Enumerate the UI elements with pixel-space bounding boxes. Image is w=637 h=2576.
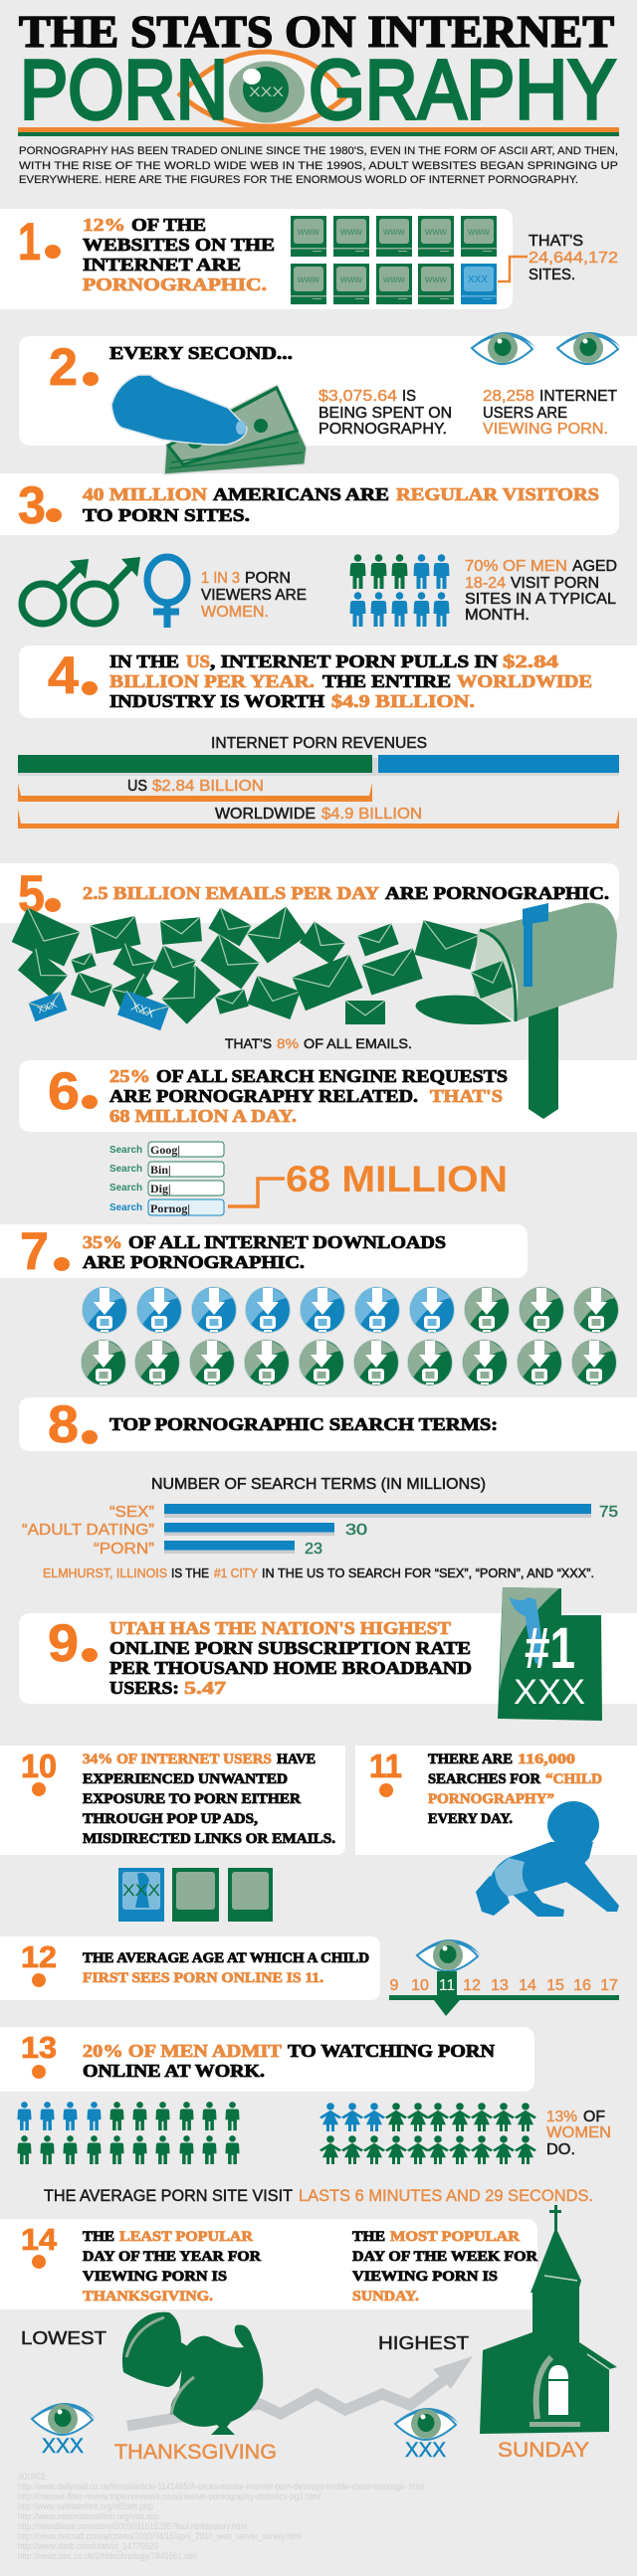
icon: cash stack bbox=[164, 385, 307, 474]
icon: utah map bbox=[498, 1587, 602, 1721]
panel background bbox=[19, 645, 637, 718]
source list: http://news.bbc.co.uk/2/hi/technology/7845561.stm bbox=[18, 2551, 197, 2561]
panel background bbox=[19, 1060, 637, 1132]
search queries: Dig| bbox=[150, 1182, 171, 1196]
source list: http://internet-filter-review.toptenreviews.com/internet-pornography-statistics-pg3.html bbox=[18, 2491, 320, 2501]
stat text: $4.9 BILLION. bbox=[331, 691, 475, 711]
stat text: AMERICANS ARE bbox=[213, 484, 389, 504]
text: 8 percent of emails: 8% bbox=[277, 1035, 299, 1051]
text: users viewing bbox=[483, 388, 617, 438]
stat text: THE AVERAGE AGE AT WHICH A CHILD bbox=[83, 1950, 369, 1966]
stat text: PORNOGRAPHY” bbox=[428, 1791, 554, 1807]
icon: eye behind the title: XXX bbox=[249, 84, 285, 99]
panel: stat 10 bbox=[0, 1746, 345, 1855]
panel: stat 9 bbox=[19, 1587, 637, 1721]
stat text: USERS: bbox=[109, 1678, 179, 1698]
stat text: THAT'S bbox=[430, 1086, 503, 1106]
text: least popular bbox=[83, 2229, 261, 2304]
icon: eye behind the title bbox=[180, 52, 345, 126]
age numbers: 10 bbox=[411, 1977, 429, 1994]
number 2: 2 bbox=[49, 338, 78, 397]
number 5: 5 bbox=[18, 865, 45, 924]
text: men aged 18-24: VISIT PORN bbox=[511, 575, 599, 592]
stat text: OF ALL INTERNET DOWNLOADS bbox=[128, 1232, 446, 1252]
panel background bbox=[0, 2219, 537, 2309]
stat text: 68 MILLION A DAY. bbox=[109, 1106, 297, 1126]
number 1: 1 bbox=[18, 213, 41, 272]
number 7 bbox=[20, 1222, 70, 1281]
text: users viewing: 28,258 bbox=[483, 388, 534, 405]
computer grid: www bbox=[382, 275, 405, 285]
search labels: Search bbox=[109, 1163, 142, 1175]
blue xxx envelopes: XXX bbox=[36, 1000, 59, 1016]
text: 13 percent of women: 13% bbox=[546, 2109, 577, 2125]
stat text: OF THE bbox=[131, 215, 206, 235]
panel background bbox=[19, 336, 637, 446]
stat text bbox=[83, 1950, 369, 1986]
stat text: US bbox=[186, 651, 210, 671]
us bracket: $2.84 BILLION bbox=[152, 778, 264, 795]
text: dollars spent bbox=[318, 388, 452, 438]
bar labels: “ADULT DATING” bbox=[22, 1522, 154, 1539]
number 6 bbox=[48, 1062, 98, 1121]
stat text: ONLINE AT WORK. bbox=[83, 2061, 265, 2081]
blue xxx envelopes: XXX bbox=[129, 1000, 156, 1020]
stat text: TO PORN SITES. bbox=[83, 505, 250, 525]
stat text bbox=[83, 1751, 335, 1847]
text: women viewers: WOMEN. bbox=[201, 604, 269, 621]
icon: utah map: XXX bbox=[514, 1673, 585, 1712]
icon: three monitors bbox=[118, 1868, 273, 1922]
computer grid: www bbox=[297, 275, 319, 285]
search labels: Search bbox=[109, 1201, 142, 1213]
panel: stat 6 bbox=[19, 1060, 637, 1132]
icon: eye low bbox=[30, 2403, 96, 2435]
source list: SOURCE: bbox=[18, 2472, 48, 2482]
sites callout: SITES. bbox=[529, 267, 575, 283]
search queries: Bin| bbox=[150, 1163, 171, 1177]
intro paragraph bbox=[19, 145, 618, 186]
source list bbox=[18, 2472, 424, 2561]
stat text: 40 MILLION bbox=[83, 484, 207, 504]
age numbers: 13 bbox=[491, 1977, 509, 1994]
age numbers: 9 bbox=[390, 1977, 399, 1994]
text: 13 percent of women: WOMEN bbox=[546, 2124, 611, 2141]
timeline bar and pointer bbox=[389, 1971, 619, 2016]
number 3: 3 bbox=[18, 476, 46, 535]
number 8: 8 bbox=[48, 1395, 79, 1454]
sites callout bbox=[529, 233, 618, 283]
worldwide bracket: WORLDWIDE bbox=[215, 806, 316, 823]
stat text: EVERY DAY. bbox=[428, 1811, 513, 1827]
number 5 bbox=[18, 865, 61, 924]
age numbers: 12 bbox=[463, 1977, 481, 1994]
header stripe bbox=[18, 127, 619, 136]
icon: eye high bbox=[393, 2408, 459, 2440]
worldwide bracket bbox=[18, 806, 619, 828]
panel: stat 14 bbox=[0, 2219, 537, 2309]
note: elmhurst: #1 CITY bbox=[214, 1566, 259, 1580]
panel background bbox=[0, 209, 513, 309]
computer grid: www bbox=[297, 227, 319, 238]
search boxes bbox=[109, 1142, 224, 1215]
panel: stat 13 bbox=[0, 2027, 534, 2092]
text: most popular: DAY OF THE WEEK FOR bbox=[352, 2249, 537, 2265]
source list: http://news.netcraft.com/archives/2010/04/15/april_2010_web_server_survey.html bbox=[18, 2531, 302, 2541]
people grid: 70 percent of men bbox=[350, 554, 450, 627]
stat text: 35% bbox=[83, 1232, 122, 1252]
text: 8 percent of emails: OF ALL EMAILS. bbox=[304, 1035, 412, 1051]
stat text: WEBSITES ON THE bbox=[83, 235, 275, 255]
text: men aged 18-24: SITES IN A TYPICAL bbox=[465, 591, 616, 608]
note: elmhurst bbox=[43, 1566, 594, 1580]
stat text: IN THE bbox=[109, 651, 179, 671]
stat text: THROUGH POP UP ADS, bbox=[83, 1811, 258, 1827]
stat text bbox=[83, 2041, 495, 2081]
text: women viewers: 1 IN 3 bbox=[201, 570, 240, 587]
icon: church bbox=[480, 2205, 617, 2434]
blue xxx envelopes bbox=[29, 991, 169, 1030]
number 7: 7 bbox=[20, 1222, 49, 1281]
stat text: TOP PORNOGRAPHIC SEARCH TERMS: bbox=[109, 1414, 498, 1434]
title line: the stats on internet: THE STATS ON INTERNET bbox=[19, 7, 614, 57]
bars bbox=[164, 1504, 591, 1554]
stat text bbox=[109, 651, 592, 711]
intro paragraph: WITH THE RISE OF THE WORLD WIDE WEB IN THE 1990S, ADULT WEBSITES BEGAN SPRINGING UP bbox=[19, 160, 618, 172]
bar values: 75 bbox=[599, 1504, 618, 1521]
label: highest: HIGHEST bbox=[378, 2333, 469, 2353]
computer grid: www bbox=[424, 275, 447, 285]
people grid: men bbox=[17, 2102, 240, 2164]
text: men aged 18-24: 70% OF MEN bbox=[465, 558, 567, 575]
panel background bbox=[0, 1936, 380, 2000]
chart title: NUMBER OF SEARCH TERMS (IN MILLIONS) bbox=[151, 1476, 486, 1493]
heading: every second: EVERY SECOND... bbox=[109, 343, 293, 363]
text: most popular bbox=[352, 2229, 537, 2304]
panel background bbox=[0, 473, 619, 535]
icon: female symbol bbox=[147, 557, 187, 628]
search fields bbox=[148, 1142, 224, 1215]
chart: internet porn revenues bbox=[18, 735, 619, 828]
us bracket bbox=[18, 778, 372, 802]
stat text: THE ENTIRE bbox=[322, 671, 451, 691]
stat text: 5.47 bbox=[184, 1678, 226, 1698]
label: lowest: LOWEST bbox=[21, 2328, 106, 2348]
number 9: 9 bbox=[48, 1614, 79, 1673]
stat text bbox=[83, 215, 275, 294]
connector line bbox=[498, 257, 528, 281]
stat text: INDUSTRY IS WORTH bbox=[109, 691, 324, 711]
text: men aged 18-24: 18-24 bbox=[465, 575, 506, 592]
number 2 bbox=[49, 338, 99, 397]
search queries bbox=[150, 1143, 190, 1215]
text: average visit: LASTS 6 MINUTES AND 29 SECONDS. bbox=[299, 2186, 593, 2205]
bar values: 23 bbox=[305, 1541, 322, 1558]
age numbers: 15 bbox=[546, 1977, 564, 1994]
stat text: , INTERNET PORN PULLS IN bbox=[210, 651, 498, 671]
bar values bbox=[305, 1504, 618, 1558]
stat text: REGULAR VISITORS bbox=[396, 484, 599, 504]
computer grid: XXX bbox=[468, 275, 488, 285]
number 4: 4 bbox=[48, 646, 80, 705]
text: men aged 18-24: MONTH. bbox=[465, 607, 530, 624]
text: least popular: DAY OF THE YEAR FOR bbox=[83, 2249, 261, 2265]
bar labels: “PORN” bbox=[94, 1541, 154, 1558]
number 13 bbox=[21, 2030, 57, 2079]
age numbers bbox=[390, 1977, 618, 1994]
mailbox post bbox=[529, 1002, 558, 1119]
computer grid: www bbox=[424, 227, 447, 238]
text: most popular: MOST POPULAR bbox=[390, 2229, 520, 2245]
text: most popular: SUNDAY. bbox=[352, 2289, 419, 2304]
text: dollars spent: IS bbox=[402, 388, 416, 405]
eye icon bbox=[415, 1939, 481, 1971]
search queries: Pornog| bbox=[150, 1201, 190, 1215]
stat text: HAVE bbox=[277, 1751, 316, 1767]
note: elmhurst: ELMHURST, ILLINOIS bbox=[43, 1566, 167, 1580]
chart title: INTERNET PORN REVENUES bbox=[211, 735, 427, 752]
stat text: THERE ARE bbox=[428, 1751, 513, 1767]
stat text: FIRST SEES PORN ONLINE IS 11. bbox=[83, 1970, 323, 1986]
panel: stat 3 bbox=[0, 473, 619, 535]
text: least popular: THE bbox=[83, 2229, 114, 2245]
source list: http://www.sltrib.com/utah/ci_14770529 bbox=[18, 2541, 158, 2551]
text: least popular: LEAST POPULAR bbox=[119, 2229, 253, 2245]
stat text: ONLINE PORN SUBSCRIPTION RATE bbox=[109, 1638, 471, 1658]
label: sunday: SUNDAY bbox=[498, 2439, 589, 2462]
source list: http://newsblaze.com/story/2009031615295?faul.nb/topstory.html bbox=[18, 2521, 247, 2531]
age numbers: 14 bbox=[519, 1977, 536, 1994]
callout: 68 million: 68 MILLION bbox=[286, 1159, 508, 1199]
text: dollars spent: BEING SPENT ON bbox=[318, 405, 452, 422]
source list: http://www.dailymail.co.uk/femail/article-1141465/A-clicks-mouse-internet-porn-destroys-middle-class-marriage-.html bbox=[18, 2482, 424, 2491]
envelope in mailbox bbox=[471, 961, 513, 999]
age timeline bbox=[389, 1939, 619, 2016]
panel: stat 1 bbox=[0, 209, 618, 309]
number 1 bbox=[18, 213, 61, 272]
green envelopes bbox=[12, 906, 480, 1024]
age numbers: 11 bbox=[439, 1977, 455, 1994]
note: elmhurst: IS THE bbox=[171, 1566, 209, 1580]
stat text: 2.5 BILLION EMAILS PER DAY bbox=[83, 883, 379, 903]
number 14: 14 bbox=[21, 2222, 58, 2257]
sites callout: 24,644,172 bbox=[529, 250, 618, 267]
text: average visit bbox=[44, 2186, 593, 2205]
stat text: “CHILD bbox=[545, 1771, 602, 1787]
number 11: 11 bbox=[369, 1748, 402, 1784]
text: users viewing: USERS ARE bbox=[483, 405, 567, 422]
connector line bbox=[228, 1179, 285, 1206]
number 13: 13 bbox=[21, 2030, 57, 2065]
arrow: rising trend bbox=[127, 2356, 473, 2426]
icon: eye right bbox=[555, 332, 621, 364]
stat text: $2.84 bbox=[503, 651, 558, 671]
worldwide bracket: $4.9 BILLION bbox=[321, 806, 422, 823]
icon: three monitors: XXX bbox=[122, 1881, 160, 1900]
illustration: envelopes flying out of mailbox bbox=[12, 903, 617, 1119]
mailbox flag bbox=[523, 903, 548, 987]
stat text bbox=[428, 1751, 602, 1827]
intro paragraph: EVERYWHERE. HERE ARE THE FIGURES FOR THE ENORMOUS WORLD OF INTERNET PORNOGRAPHY. bbox=[19, 174, 578, 186]
text: least popular: VIEWING PORN IS bbox=[83, 2269, 227, 2285]
text: 13 percent of women bbox=[546, 2109, 611, 2158]
stat text: 12% bbox=[83, 215, 125, 235]
computer grid bbox=[291, 216, 497, 304]
icon: male symbol 2 bbox=[74, 557, 140, 624]
text: women viewers: PORN bbox=[245, 570, 291, 587]
stat text: ARE PORNOGRAPHIC. bbox=[385, 883, 609, 903]
text: users viewing: VIEWING PORN. bbox=[483, 421, 608, 438]
stat text: 34% OF INTERNET USERS bbox=[83, 1751, 272, 1767]
chart: search terms bbox=[22, 1476, 618, 1580]
text: users viewing: INTERNET bbox=[539, 388, 617, 405]
text: average visit: THE AVERAGE PORN SITE VISIT bbox=[44, 2186, 293, 2205]
text: most popular: THE bbox=[352, 2229, 385, 2245]
stat text: EXPOSURE TO PORN EITHER bbox=[83, 1791, 301, 1807]
text: women viewers: VIEWERS ARE bbox=[201, 587, 307, 604]
panel background bbox=[19, 1397, 637, 1451]
mailbox bbox=[416, 903, 617, 1119]
stat text: SEARCHES FOR bbox=[428, 1771, 540, 1787]
text: 8 percent of emails bbox=[225, 1035, 412, 1051]
stat text bbox=[83, 883, 609, 903]
stat text: WORLDWIDE bbox=[457, 671, 592, 691]
stat text: ARE PORNOGRAPHIC. bbox=[83, 1252, 305, 1272]
icon: male symbol 1 bbox=[22, 559, 89, 624]
stat text bbox=[109, 1066, 508, 1126]
panel background bbox=[0, 2027, 534, 2092]
computer grid: www bbox=[339, 227, 362, 238]
panel: stat 4 bbox=[19, 645, 637, 718]
label: xxx low: XXX bbox=[42, 2435, 84, 2458]
text: men aged 18-24 bbox=[465, 558, 617, 624]
number 4 bbox=[48, 646, 98, 705]
title word: pornography: PORN bbox=[20, 43, 228, 136]
panel: stat 5 bbox=[0, 863, 619, 924]
us bracket: US bbox=[127, 778, 147, 795]
bar labels: “SEX” bbox=[109, 1504, 154, 1521]
number 9 bbox=[48, 1614, 98, 1673]
computer grid: www bbox=[467, 227, 490, 238]
text: women viewers bbox=[201, 570, 307, 621]
sites callout: THAT'S bbox=[529, 233, 583, 250]
stat text: 20% OF MEN ADMIT bbox=[83, 2041, 282, 2061]
stat text: UTAH HAS THE NATION'S HIGHEST bbox=[109, 1618, 451, 1638]
icon: eye left bbox=[470, 332, 535, 364]
search labels bbox=[109, 1144, 142, 1213]
title word: pornography bbox=[20, 43, 616, 136]
bar values: 30 bbox=[345, 1522, 367, 1539]
stat text: 25% bbox=[109, 1066, 150, 1086]
icons: male and female symbols bbox=[22, 557, 187, 628]
stat text: INTERNET ARE bbox=[83, 255, 241, 275]
mailbox interior bbox=[474, 930, 516, 1021]
download icons bbox=[82, 1287, 619, 1385]
intro paragraph: PORNOGRAPHY HAS BEEN TRADED ONLINE SINCE THE 1980'S, EVEN IN THE FORM OF ASCII ART, AND THEN, bbox=[19, 145, 618, 157]
panel: stat 12 bbox=[0, 1936, 380, 2000]
icon: crawling baby bbox=[476, 1801, 619, 1917]
source list: http://www.safefamilies.org/sfStats.php bbox=[18, 2501, 153, 2511]
text: 13 percent of women: DO. bbox=[546, 2141, 575, 2158]
panel: stat 7 bbox=[0, 1222, 528, 1281]
panel: stat 2 bbox=[19, 332, 637, 474]
panel: stat 8 bbox=[19, 1395, 637, 1454]
number 8 bbox=[48, 1395, 98, 1454]
text: most popular: VIEWING PORN IS bbox=[352, 2269, 498, 2285]
icon: utah map: #1 bbox=[525, 1616, 575, 1681]
stat text: EXPERIENCED UNWANTED bbox=[83, 1771, 288, 1787]
mailbox door bbox=[416, 996, 512, 1024]
stat text bbox=[83, 484, 599, 525]
number 6: 6 bbox=[48, 1062, 80, 1121]
revenue bar bbox=[18, 755, 619, 776]
panel background bbox=[19, 1613, 637, 1704]
age numbers: 17 bbox=[600, 1977, 618, 1994]
number 10: 10 bbox=[21, 1748, 57, 1784]
label: thanksgiving: THANKSGIVING bbox=[114, 2441, 277, 2464]
number 14 bbox=[21, 2222, 58, 2269]
text: least popular: THANKSGIVING. bbox=[83, 2289, 213, 2304]
text: men aged 18-24: AGED bbox=[572, 558, 617, 575]
header bbox=[18, 7, 619, 186]
search queries: Goog| bbox=[150, 1143, 180, 1157]
text: 8 percent of emails: THAT'S bbox=[225, 1035, 272, 1051]
stat text: ARE PORNOGRAPHY RELATED. bbox=[109, 1086, 418, 1106]
panel background bbox=[355, 1746, 637, 1855]
icon: turkey bbox=[122, 2312, 263, 2435]
stat text: OF ALL SEARCH ENGINE REQUESTS bbox=[156, 1066, 508, 1086]
stat text: MISDIRECTED LINKS OR EMAILS. bbox=[83, 1831, 335, 1847]
stat text: 116,000 bbox=[518, 1751, 575, 1767]
computer grid: www bbox=[382, 227, 405, 238]
mailbox body bbox=[480, 903, 617, 1021]
text: dollars spent: PORNOGRAPHY. bbox=[318, 421, 447, 438]
stat text: BILLION PER YEAR. bbox=[109, 671, 315, 691]
number 3 bbox=[18, 476, 62, 535]
note: elmhurst: IN THE US TO SEARCH FOR “SEX”, “PORN”, AND “XXX”. bbox=[262, 1566, 594, 1580]
label: xxx high: XXX bbox=[405, 2439, 446, 2462]
stat text bbox=[109, 1618, 472, 1698]
source list: http://www.nationalcoalition.org/stat.asp bbox=[18, 2511, 159, 2521]
text: 13 percent of women: OF bbox=[583, 2109, 605, 2125]
panel background bbox=[0, 1224, 528, 1278]
panel: stat 11 bbox=[355, 1746, 637, 1917]
icon: hand holding cash bbox=[111, 375, 247, 445]
people grid: women bbox=[319, 2103, 536, 2164]
stat text bbox=[83, 1232, 446, 1272]
computer grid: www bbox=[339, 275, 362, 285]
panel background bbox=[0, 863, 619, 923]
stat text: PORNOGRAPHIC. bbox=[83, 275, 267, 294]
bar labels bbox=[22, 1504, 154, 1558]
age numbers: 16 bbox=[573, 1977, 591, 1994]
text: dollars spent: $3,075.64 bbox=[318, 388, 397, 405]
search labels: Search bbox=[109, 1182, 142, 1194]
stat text: TO WATCHING PORN bbox=[288, 2041, 495, 2061]
stat text: PER THOUSAND HOME BROADBAND bbox=[109, 1658, 472, 1678]
number 12 bbox=[21, 1939, 57, 1987]
number 12: 12 bbox=[21, 1939, 57, 1974]
search labels: Search bbox=[109, 1144, 142, 1156]
panel background bbox=[0, 1746, 345, 1855]
